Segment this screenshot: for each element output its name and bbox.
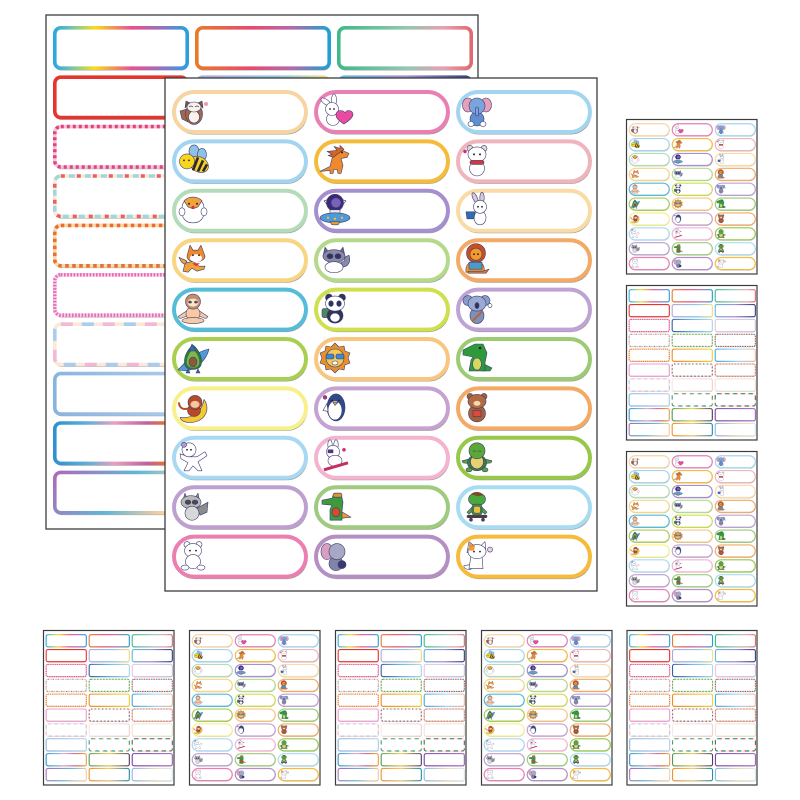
label: avocado with surfboard [174,339,308,382]
thumbnail: animal sheet, right bottom [626,452,757,606]
icon: koala [463,296,492,324]
icon: rabbit on skateboard [324,440,348,470]
rectangular name labels grid [54,28,472,515]
label: sun with sunglasses [316,339,450,382]
icon: gray raccoon [181,493,208,520]
label: bee [174,141,308,184]
label: crocodile [458,339,592,382]
thumbnail: rectangle sheet, bottom 1 [44,630,174,785]
label: blue elephant [458,92,592,134]
icon: owl [180,101,208,124]
label: penguin [316,388,450,431]
icon: monkey on banana [179,395,207,422]
thumbnail: rectangle sheet, right middle [626,286,757,440]
label: monkey on banana [174,388,308,431]
icon: white bear dabbing [180,442,207,471]
icon: panda [322,294,346,323]
icon: sloth meditating [178,294,208,324]
sheet background [165,78,597,591]
sheet background [46,15,478,529]
icon: crocodile [463,344,492,371]
icon: crocodile with glasses [322,493,351,520]
label: hamster [174,191,308,233]
label: crocodile with glasses [316,487,450,530]
icon: white bear with red scarf [463,145,487,176]
label: sloth meditating [174,290,308,332]
label: astronaut on UFO [316,191,450,233]
label: panda [316,290,450,332]
icon: rabbit with heart [320,94,353,126]
label: gray elephant [316,537,450,579]
label: shiba dog [174,240,308,283]
icon: orange dragon [320,145,349,173]
icon: frog on skateboard [467,492,487,521]
panel: large animal-label sheet (front) [165,78,597,591]
icon: bee [180,145,211,176]
icon: rabbit with blue pot [466,192,486,225]
icon: hamster [179,197,207,223]
panel: large rectangular-label sheet (back) [46,15,478,529]
icon: avocado with surfboard [178,344,209,373]
thumbnail: animal sheet, bottom 4 [482,630,612,785]
icon: shiba dog [179,245,205,272]
rounded animal name labels grid [174,92,592,579]
icon: astronaut on UFO [320,194,350,225]
icon: white cat with orange patch [464,542,492,569]
label: gray raccoon [174,487,308,530]
label: rabbit with heart [316,92,450,134]
icon: blue elephant [462,98,492,126]
label: koala [458,290,592,332]
label: frog on skateboard [458,487,592,530]
icon: gray elephant [321,544,346,571]
icon: white bear sitting [181,542,205,570]
label: rabbit on skateboard [316,438,450,480]
icon: penguin [323,394,345,421]
icon: turtle [462,443,492,472]
thumbnail: rectangle sheet, bottom 5 [627,630,757,785]
label: lion reading [458,240,592,283]
thumbnail: animal sheet, bottom 2 [190,630,320,785]
label: white bear with red scarf [458,141,592,184]
thumbnail: rectangle sheet, bottom 3 [336,630,466,785]
label: white bear sitting [174,537,308,579]
label: turtle [458,438,592,480]
label: raccoon [316,240,450,283]
label: owl [174,92,308,134]
icon: lion reading [466,244,489,273]
label: brown bear [458,388,592,431]
icon: brown bear [467,393,487,422]
icon: sun with sunglasses [320,343,350,373]
label: white cat with orange patch [458,537,592,579]
label: orange dragon [316,141,450,184]
thumbnail: animal sheet, right top [626,120,757,274]
label: white bear dabbing [174,438,308,480]
icon: raccoon [323,247,350,273]
label: rabbit with blue pot [458,191,592,233]
